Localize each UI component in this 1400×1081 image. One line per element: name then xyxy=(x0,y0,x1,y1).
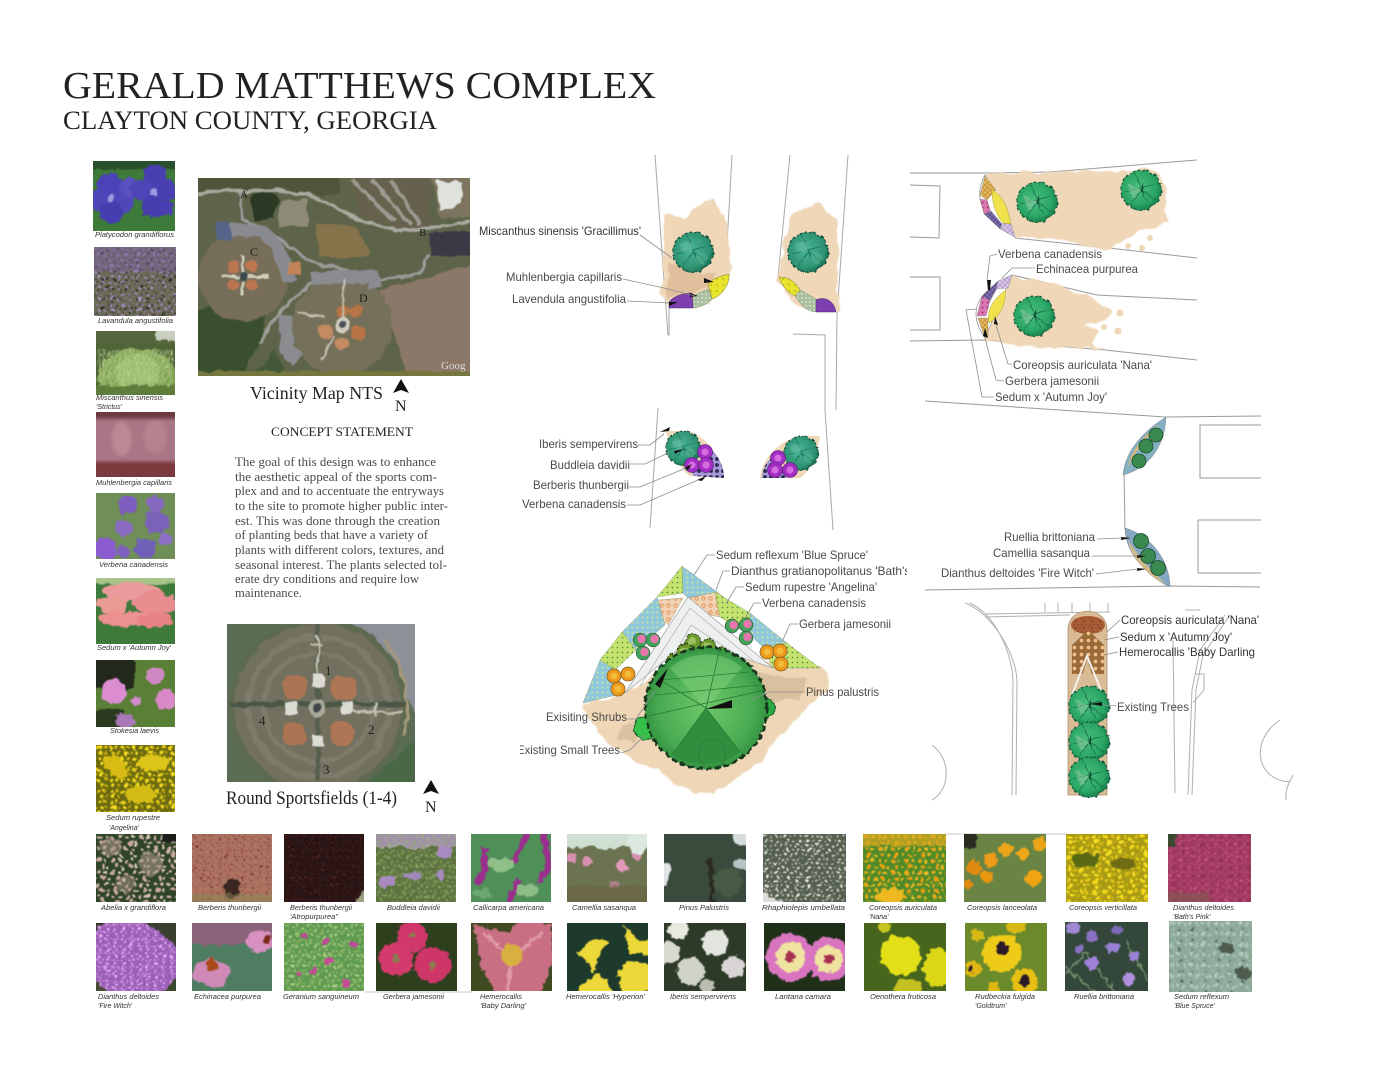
labels: Ruellia brittoniana xyxy=(1004,530,1095,544)
caption: Coreopsis verticillata xyxy=(1069,905,1137,912)
bed with two trees xyxy=(980,170,1172,251)
caption: Berberis thunbergii xyxy=(198,905,261,912)
north arrow: vicinity map: N xyxy=(395,398,407,415)
photo: Echinacea purpurea xyxy=(192,923,272,991)
caption: Iberis sempervirens xyxy=(670,994,737,1001)
triangular planting mix xyxy=(583,566,820,703)
panel: leaf beds: Dianthus deltoides 'Fire Witch' xyxy=(941,566,1094,580)
sportsfields aerial xyxy=(227,624,415,782)
north arrow: sportsfields xyxy=(423,780,439,816)
panel: triangle planting bed: Exisiting Shrubs xyxy=(546,710,627,724)
white walkway xyxy=(625,597,773,693)
caption: Hemerocallis xyxy=(480,994,523,1001)
caption: Sedum reflexum xyxy=(1174,994,1229,1001)
caption: Stokesia laevis xyxy=(110,728,160,735)
panel: triangle planting bed: Dianthus gratianopolitanus 'Bath's Pink' xyxy=(731,564,939,578)
panel: triangle planting bed: Sedum rupestre 'Angelina' xyxy=(745,580,877,594)
concept statement text: The goal of this design was to enhance xyxy=(235,455,436,469)
panel: entry beds top: Muhlenbergia capillaris xyxy=(506,270,622,284)
caption: Abelia x grandiflora xyxy=(100,905,166,912)
panel: entry beds lower xyxy=(522,408,820,528)
panel: triangle planting bed: Gerbera jamesonii xyxy=(799,617,891,631)
caption: 'Nana' xyxy=(869,914,889,921)
caption: 'Baby Darling' xyxy=(480,1003,527,1010)
labels: Coreopsis auriculata 'Nana' xyxy=(1121,613,1259,627)
caption: Berberis thunbergii xyxy=(290,905,352,912)
panel: entry beds lower: Berberis thunbergii xyxy=(533,478,629,492)
photo: Abelia x grandiflora xyxy=(96,834,176,902)
photo: Sedum reflexum xyxy=(1169,921,1252,992)
caption: Platycodon grandiflorus xyxy=(95,232,175,239)
concept statement text: to the site to promote higher public inter- xyxy=(235,499,448,513)
concept statement text xyxy=(235,455,448,600)
panel: entry beds lower: Verbena canadensis xyxy=(522,497,626,511)
sportsfields aerial: 3 xyxy=(323,762,330,777)
caption: Buddleia davidii xyxy=(387,905,440,912)
planting bed left lower xyxy=(660,427,724,481)
photo: Lavandula angustifolia xyxy=(94,247,176,316)
panel: triangle planting bed: Pinus palustris xyxy=(806,685,879,699)
photo: Iberis sempervirens xyxy=(664,923,746,991)
panel: triangle planting bed: Existing Small Trees xyxy=(517,743,620,757)
title: GERALD MATTHEWS COMPLEX xyxy=(63,65,656,107)
sportsfields aerial: 1 xyxy=(325,663,332,678)
north arrow: vicinity map xyxy=(393,379,409,415)
panel: upper right beds: Coreopsis auriculata 'Nana' xyxy=(1013,358,1152,372)
photo: Berberis Atropurpurea xyxy=(284,834,364,902)
caption: 'Bath's Pink' xyxy=(1173,914,1211,921)
labels: Sedum reflexum 'Blue Spruce' xyxy=(716,548,868,562)
planting bed right xyxy=(778,202,838,312)
flower clusters xyxy=(725,619,739,633)
sportsfields aerial: 4 xyxy=(259,713,266,728)
caption: Rudbeckia fulgida xyxy=(975,994,1035,1001)
caption: Muhlenbergia capillaris xyxy=(96,480,173,487)
subtitle: CLAYTON COUNTY, GEORGIA xyxy=(63,106,437,135)
photo: Miscanthus sinensis xyxy=(96,331,175,395)
strip bed xyxy=(1068,611,1109,797)
mulch bed xyxy=(582,640,829,795)
photo: Verbena canadensis xyxy=(96,493,175,559)
concept statement text: maintenance. xyxy=(235,586,302,600)
panel: entry beds top: Lavendula angustifolia xyxy=(512,292,626,306)
caption: Hemerocallis 'Hyperion' xyxy=(566,994,646,1001)
concept statement heading: CONCEPT STATEMENT xyxy=(271,425,413,439)
panel: median strip plan: Existing Trees xyxy=(1117,700,1189,714)
panel: leaf beds xyxy=(925,417,1261,590)
lower leaf bed xyxy=(1121,528,1170,587)
photo: Geranium sanguineum xyxy=(284,923,364,991)
caption: 'Goldtrum' xyxy=(975,1003,1007,1010)
caption: Sedum x 'Autumn Joy' xyxy=(97,645,172,652)
caption: 'Atropurpurea" xyxy=(290,914,339,921)
caption: Camellia sasanqua xyxy=(572,905,636,912)
concept statement text: the aesthetic appeal of the sports com- xyxy=(235,470,437,484)
photo: Rhaphiolepis umbellata xyxy=(763,834,846,902)
caption: Geranium sanguineum xyxy=(283,994,359,1001)
photo: Rudbeckia fulgida xyxy=(965,923,1047,991)
photo: Lantana camara xyxy=(764,923,845,991)
caption: Pinus Palustris xyxy=(679,905,730,912)
photo: Sedum rupestre Angelina xyxy=(96,745,175,812)
panel: triangle planting bed: Verbena canadensis xyxy=(762,596,866,610)
photo: Hemerocallis Baby Darling xyxy=(471,923,552,991)
vicinity map: A xyxy=(240,189,248,201)
bed with one tree xyxy=(976,275,1124,350)
caption: Sedum rupestre xyxy=(106,815,160,822)
panel: median strip plan xyxy=(932,603,1293,800)
labels: Verbena canadensis xyxy=(998,247,1102,261)
panel: bottom plant photo rows xyxy=(90,828,1258,1010)
concept statement text: of planting beds that have a variety of xyxy=(235,528,429,542)
caption: Callicarpa americana xyxy=(473,905,544,912)
photo: Gerbera jamesonii xyxy=(376,923,457,991)
existing shrubs xyxy=(665,634,728,670)
panel: left plant photo column xyxy=(87,155,182,832)
caption: Dianthus deltoides xyxy=(98,994,160,1001)
concept statement text: seasonal interest. The plants selected tol- xyxy=(235,558,447,572)
caption: 'Angelina' xyxy=(109,825,140,832)
vicinity map: C xyxy=(250,245,258,259)
caption: Lavandula angustifolia xyxy=(98,318,173,325)
caption: Coreopsis auriculata xyxy=(869,905,937,912)
panel: upper right beds: Gerbera jamesonii xyxy=(1005,374,1099,388)
photo: Coreopsis verticillata xyxy=(1066,834,1148,902)
concept statement text: plants with different colors, textures, and xyxy=(235,543,445,557)
photo: Callicarpa americana xyxy=(471,834,551,902)
sportsfields aerial: 2 xyxy=(368,722,374,737)
photo: Hemerocallis Hyperion xyxy=(567,923,648,991)
photo: Oenothera fruticosa xyxy=(864,923,946,991)
panel: leaf beds: Camellia sasanqua xyxy=(993,546,1090,560)
panel: upper right beds: Sedum x 'Autumn Joy' xyxy=(995,390,1107,404)
concept statement text: est. This was done through the creation xyxy=(235,514,441,528)
panel: entry beds top xyxy=(479,155,848,530)
labels: Iberis sempervirens xyxy=(539,437,638,451)
photo: Coreopsis lanceolata xyxy=(964,834,1046,902)
caption: Verbena canadensis xyxy=(99,562,169,569)
north arrow: sportsfields: N xyxy=(425,799,437,816)
photo: Dianthus Bath's Pink xyxy=(1168,834,1251,902)
caption: Gerbera jamesonii xyxy=(383,994,444,1001)
caption: Miscanthus sinensis xyxy=(96,395,164,402)
panel: upper right beds: Echinacea purpurea xyxy=(1036,262,1138,276)
panel: upper right beds xyxy=(910,160,1261,478)
photo: Muhlenbergia capillaris xyxy=(96,412,175,477)
vicinity map: Goog xyxy=(441,360,466,372)
planting bed left xyxy=(662,198,732,308)
pine tree xyxy=(645,647,767,769)
caption: Lantana camara xyxy=(775,994,831,1001)
photo: Ruellia brittoniana xyxy=(1065,922,1148,991)
caption: 'Blue Spruce' xyxy=(1174,1003,1215,1010)
small trees xyxy=(634,698,775,740)
concept statement text: erate dry conditions and require low xyxy=(235,572,419,586)
caption: 'Strictus' xyxy=(96,404,123,411)
panel: triangle planting bed xyxy=(517,548,939,795)
upper leaf bed xyxy=(1123,417,1166,475)
vicinity map: D xyxy=(359,291,368,305)
vicinity map caption: Vicinity Map NTS xyxy=(250,383,383,403)
caption: Echinacea purpurea xyxy=(194,994,261,1001)
planting bed right lower xyxy=(760,436,820,478)
photo: Platycodon grandiflorus xyxy=(93,161,175,231)
photo: Sedum x Autumn Joy xyxy=(96,578,175,644)
caption: Dianthus deltoides xyxy=(1173,905,1235,912)
caption: 'Fire Witch' xyxy=(98,1003,133,1010)
vicinity map: B xyxy=(419,227,426,239)
photo: Buddleia davidii xyxy=(376,834,456,902)
photo: Dianthus Fire Witch xyxy=(96,923,176,991)
tree callout labels: Miscanthus sinensis 'Gracillimus' xyxy=(479,224,641,238)
sportsfields caption: Round Sportsfields (1-4) xyxy=(226,789,397,809)
caption: Oenothera fruticosa xyxy=(870,994,936,1001)
photo: Pinus Palustris xyxy=(664,834,746,902)
crescent planting xyxy=(980,175,1015,237)
caption: Coreopsis lanceolata xyxy=(967,905,1037,912)
panel: median strip plan: Sedum x 'Autumn Joy' xyxy=(1120,630,1232,644)
vicinity map xyxy=(198,178,470,376)
photo: Berberis thunbergii xyxy=(192,834,272,902)
panel: median strip plan: Hemerocallis 'Baby Darling xyxy=(1119,645,1255,659)
photo: Camellia sasanqua xyxy=(567,834,647,902)
panel: entry beds lower: Buddleia davidii xyxy=(550,458,630,472)
photo: Stokesia laevis xyxy=(96,660,175,727)
caption: Ruellia brittoniana xyxy=(1074,994,1134,1001)
concept statement text: plex and and to accentuate the entryways xyxy=(235,484,444,498)
caption: Rhaphiolepis umbellata xyxy=(762,905,845,912)
photo: Coreopsis auriculata xyxy=(863,834,946,902)
